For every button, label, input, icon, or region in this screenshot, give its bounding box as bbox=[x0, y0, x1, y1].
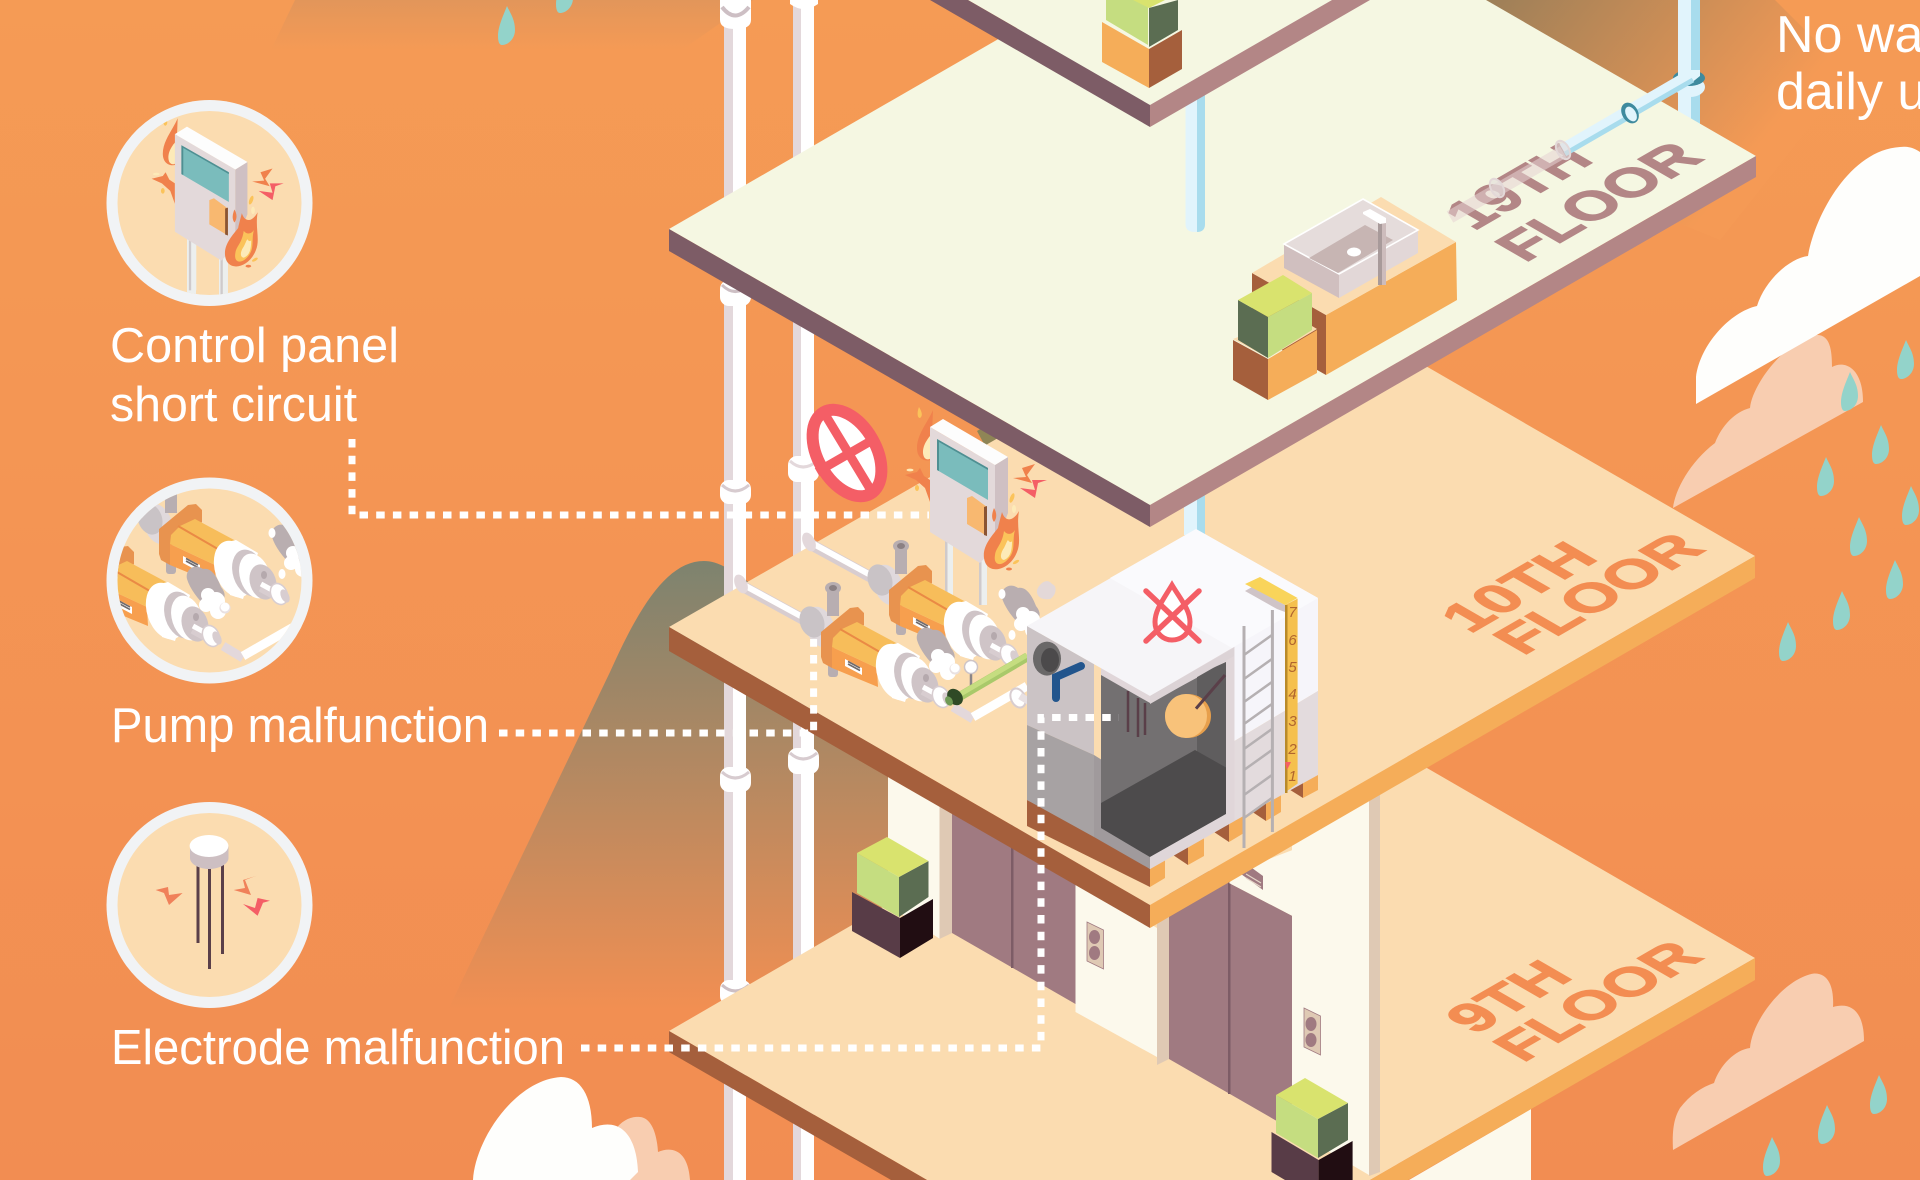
water level ruler bbox=[1245, 577, 1298, 793]
heading: electrode malfunction: Electrode malfunction bbox=[111, 1021, 565, 1075]
icon circle: control panel short circuit bbox=[106, 100, 312, 306]
label: 10th floor: 10TH bbox=[1426, 533, 1610, 640]
drops: right lower rain bbox=[1763, 1075, 1887, 1176]
water tank bbox=[1027, 529, 1318, 869]
cloud: top right peach bbox=[1673, 335, 1863, 508]
dotted leader: control panel bbox=[352, 439, 929, 515]
heading: control panel short circuit bbox=[110, 319, 399, 432]
wash basin bbox=[1284, 199, 1418, 298]
water level ruler: 6 bbox=[1288, 632, 1297, 649]
9th floor slab bbox=[669, 680, 1755, 1180]
mountain shadow behind lower floors bbox=[447, 561, 890, 1012]
label: 10th floor: FLOOR bbox=[1479, 524, 1717, 662]
19th floor slab bbox=[669, 0, 1756, 527]
plant B bbox=[1272, 1078, 1353, 1180]
water level ruler: 4 bbox=[1288, 686, 1297, 703]
water tank feet bbox=[1027, 764, 1318, 887]
drops: right upper rain bbox=[1779, 340, 1919, 661]
ladder bbox=[1244, 610, 1272, 848]
riser pipes bbox=[720, 0, 819, 1180]
water level ruler: 5 bbox=[1288, 659, 1297, 676]
control panel bbox=[905, 407, 1047, 605]
switch plate 2 bbox=[1304, 1008, 1320, 1055]
icon: no water on tank bbox=[1146, 585, 1199, 641]
left drops from top cloud bbox=[498, 0, 573, 45]
water supply pipe across floor bbox=[1450, 0, 1705, 217]
water level ruler: 2 bbox=[1287, 741, 1297, 758]
mountain shadow top right bbox=[1400, 0, 1850, 240]
cloud: lower right peach bbox=[1673, 973, 1864, 1150]
heading: control panel short circuit: short circuit bbox=[110, 378, 357, 432]
water level ruler: 3 bbox=[1288, 713, 1297, 730]
green pipe with gauge bbox=[943, 655, 1027, 708]
water level ruler: 7 bbox=[1288, 604, 1297, 621]
upper floor slab bbox=[930, 0, 1370, 127]
elevator lobby walls bbox=[888, 770, 1380, 1176]
return pipe collar bbox=[1007, 686, 1030, 710]
pumps bbox=[731, 530, 1046, 719]
vent bbox=[1241, 868, 1263, 890]
heading: control panel short circuit: Control panel bbox=[110, 319, 399, 373]
switch plate 1 bbox=[1087, 922, 1104, 969]
heading: no water for daily use bbox=[1778, 16, 1920, 120]
sink cabinet bbox=[1252, 197, 1457, 375]
valve closed symbol bbox=[798, 398, 896, 508]
plant A bbox=[852, 837, 933, 958]
dotted leader: electrode bbox=[581, 718, 1119, 1048]
cloud: bottom left white bbox=[473, 1077, 638, 1180]
heading: pump malfunction: Pump malfunction bbox=[111, 699, 489, 753]
mountain shadow top left bbox=[271, 0, 753, 50]
icon circle: electrode malfunction bbox=[106, 802, 312, 1008]
label: 9th floor: FLOOR bbox=[1479, 932, 1715, 1069]
cloud: top right white bbox=[1696, 147, 1920, 404]
wall under 9th floor bbox=[1409, 1109, 1531, 1180]
10th floor slab bbox=[669, 279, 1755, 928]
dotted leader: pump bbox=[499, 639, 814, 733]
plant on 19th floor bbox=[1233, 275, 1317, 400]
plant on upper floor bbox=[1102, 0, 1182, 88]
cloud: bottom left peach bbox=[600, 1117, 690, 1180]
label: 9th floor: 9TH bbox=[1431, 952, 1585, 1041]
label: 19th floor: 19TH bbox=[1430, 135, 1606, 237]
right blue riser bbox=[1678, 0, 1700, 130]
blue pipe from upper floor bbox=[1186, 90, 1205, 232]
olive mountain fragment bbox=[977, 425, 998, 446]
blue pipe into tank bbox=[1184, 495, 1205, 535]
water level ruler: 1 bbox=[1288, 768, 1297, 785]
loose smoke puff bbox=[1037, 581, 1056, 599]
icon circle: pump malfunction bbox=[106, 478, 312, 684]
label: 19th floor: FLOOR bbox=[1481, 133, 1716, 269]
